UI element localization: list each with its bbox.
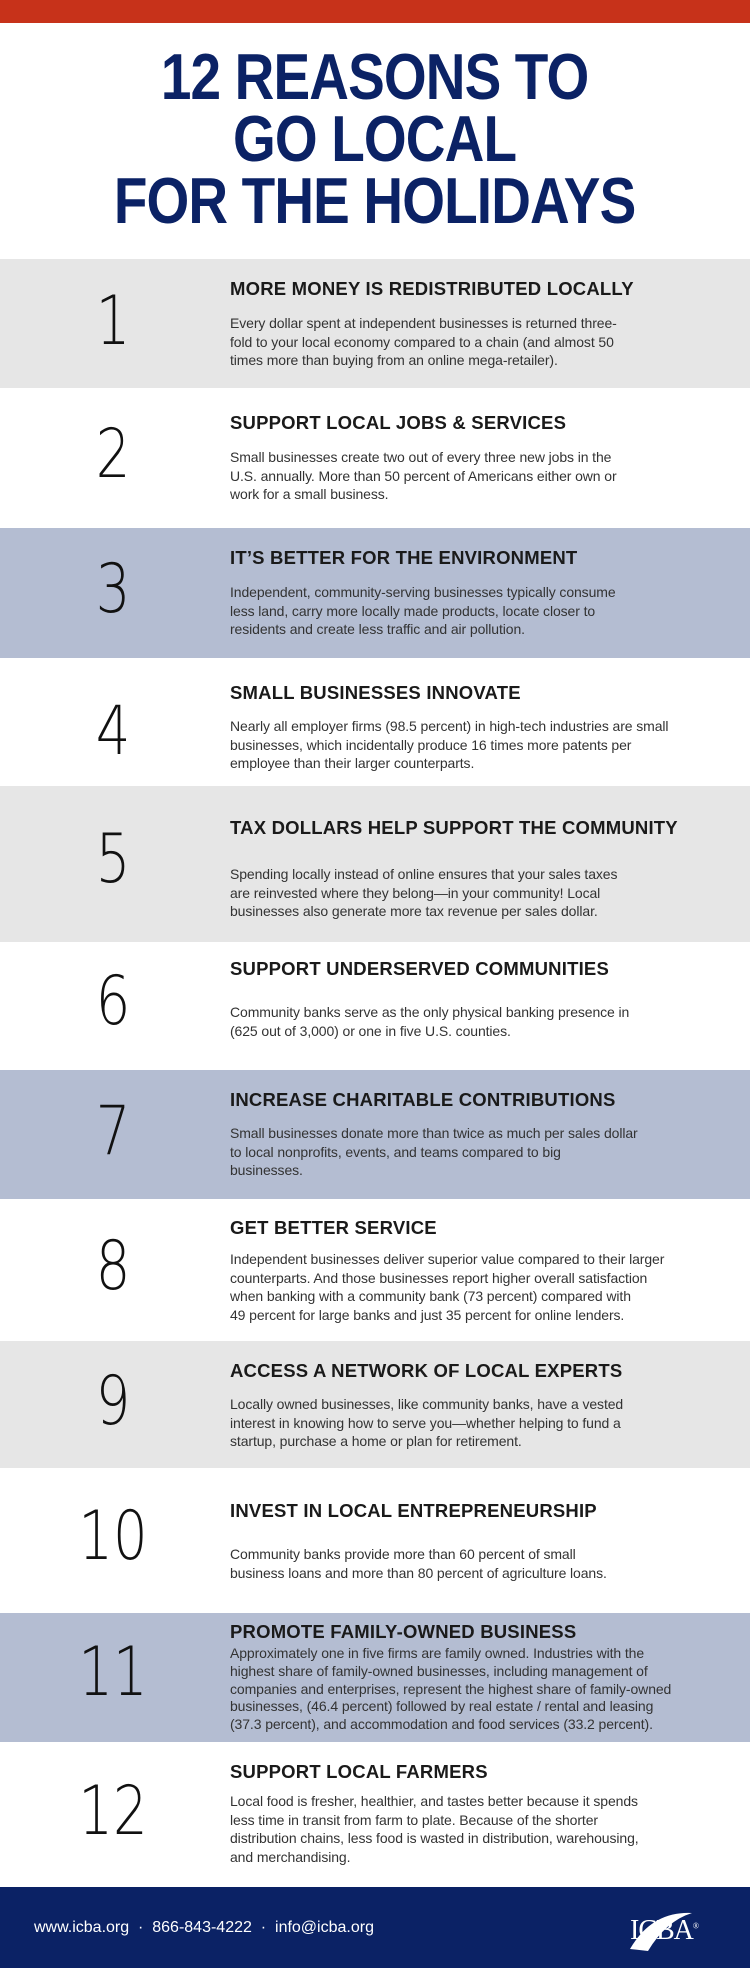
text 11: Approximately one in five firms are family owned. Industries with the bbox=[230, 1645, 644, 1661]
text 6 bbox=[230, 1004, 629, 1039]
title: FOR THE HOLIDAYS bbox=[114, 164, 636, 237]
text 5: Spending locally instead of online ensures that your sales taxes bbox=[230, 866, 617, 882]
text 12 bbox=[230, 1793, 639, 1865]
text 5: are reinvested where they belong—in your community! Local bbox=[230, 885, 600, 901]
text 11 bbox=[230, 1645, 671, 1732]
heading 9: ACCESS A NETWORK OF LOCAL EXPERTS bbox=[230, 1360, 622, 1381]
panel: reason 9 bbox=[0, 1341, 750, 1468]
heading 2: SUPPORT LOCAL JOBS & SERVICES bbox=[230, 412, 566, 433]
text 4: businesses, which incidentally produce 16 times more patents per bbox=[230, 737, 631, 753]
number 2: 2 bbox=[96, 415, 130, 494]
text 3 bbox=[230, 584, 616, 637]
text 1: fold to your local economy compared to a chain (and almost 50 bbox=[230, 334, 614, 350]
text 9: startup, purchase a home or plan for retirement. bbox=[230, 1433, 522, 1449]
heading 7: INCREASE CHARITABLE CONTRIBUTIONS bbox=[230, 1089, 616, 1110]
text 4: Nearly all employer firms (98.5 percent) in high-tech industries are small bbox=[230, 718, 668, 734]
logo: ICBA: ICBA® bbox=[630, 1915, 698, 1946]
text 6: (625 out of 3,000) or one in five U.S. counties. bbox=[230, 1023, 511, 1039]
text 4: employee than their larger counterparts. bbox=[230, 755, 474, 771]
text 7: to local nonprofits, events, and teams compared to big bbox=[230, 1144, 561, 1160]
number 9: 9 bbox=[96, 1362, 130, 1441]
number 10: 10 bbox=[78, 1497, 148, 1576]
text 10: business loans and more than 80 percent of agriculture loans. bbox=[230, 1565, 607, 1581]
text 5 bbox=[230, 866, 617, 919]
text 1: times more than buying from an online mega-retailer). bbox=[230, 352, 558, 368]
text 11: highest share of family-owned businesses, including management of bbox=[230, 1663, 648, 1679]
text 3: Independent, community-serving businesses typically consume bbox=[230, 584, 616, 600]
text 12: and merchandising. bbox=[230, 1849, 350, 1865]
text 2: Small businesses create two out of every three new jobs in the bbox=[230, 449, 611, 465]
text 7 bbox=[230, 1125, 638, 1178]
text 1: Every dollar spent at independent businesses is returned three- bbox=[230, 315, 617, 331]
panel: reason 7 bbox=[0, 1070, 750, 1199]
panel: reason 5 bbox=[0, 786, 750, 942]
panel: reason 11 bbox=[0, 1613, 750, 1742]
text 8: when banking with a community bank (73 percent) compared with bbox=[230, 1288, 631, 1304]
text 8: counterparts. And those businesses report higher overall satisfaction bbox=[230, 1270, 647, 1286]
text 10 bbox=[230, 1546, 607, 1581]
footer bbox=[0, 1887, 750, 1968]
text 12: Local food is fresher, healthier, and tastes better because it spends bbox=[230, 1793, 638, 1809]
heading 11: PROMOTE FAMILY-OWNED BUSINESS bbox=[230, 1621, 576, 1642]
text 8 bbox=[230, 1251, 664, 1323]
text 2: U.S. annually. More than 50 percent of Americans either own or bbox=[230, 468, 617, 484]
text 12: distribution chains, less food is wasted in distribution, warehousing, bbox=[230, 1830, 639, 1846]
number 3: 3 bbox=[96, 550, 130, 629]
text 9: Locally owned businesses, like community banks, have a vested bbox=[230, 1396, 623, 1412]
text 8: Independent businesses deliver superior value compared to their larger bbox=[230, 1251, 664, 1267]
heading 8: GET BETTER SERVICE bbox=[230, 1217, 437, 1238]
heading 10: INVEST IN LOCAL ENTREPRENEURSHIP bbox=[230, 1500, 597, 1521]
number 4: 4 bbox=[96, 692, 130, 771]
number 12: 12 bbox=[78, 1772, 148, 1851]
text 2: work for a small business. bbox=[230, 486, 388, 502]
text 10: Community banks provide more than 60 percent of small bbox=[230, 1546, 576, 1562]
top red bar bbox=[0, 0, 750, 23]
text 6: Community banks serve as the only physical banking presence in bbox=[230, 1004, 629, 1020]
text 9: interest in knowing how to serve you—whether helping to fund a bbox=[230, 1415, 621, 1431]
number 1: 1 bbox=[96, 282, 130, 361]
number 8: 8 bbox=[96, 1227, 130, 1306]
text 7: Small businesses donate more than twice as much per sales dollar bbox=[230, 1125, 638, 1141]
number 6: 6 bbox=[96, 962, 130, 1041]
text 3: residents and create less traffic and air pollution. bbox=[230, 621, 525, 637]
text 1 bbox=[230, 315, 617, 368]
title bbox=[114, 40, 636, 237]
number 5: 5 bbox=[96, 820, 130, 899]
panel: reason 2 bbox=[0, 388, 750, 528]
heading 12: SUPPORT LOCAL FARMERS bbox=[230, 1761, 488, 1782]
heading 5: TAX DOLLARS HELP SUPPORT THE COMMUNITY bbox=[230, 817, 678, 838]
title: GO LOCAL bbox=[233, 102, 517, 175]
text 3: less land, carry more locally made products, locate closer to bbox=[230, 603, 595, 619]
text 9 bbox=[230, 1396, 623, 1449]
heading 6: SUPPORT UNDERSERVED COMMUNITIES bbox=[230, 958, 609, 979]
number 7: 7 bbox=[96, 1092, 130, 1171]
text 5: businesses also generate more tax revenue per sales dollar. bbox=[230, 903, 598, 919]
text 2 bbox=[230, 449, 617, 502]
text 11: businesses, (46.4 percent) followed by real estate / rental and leasing bbox=[230, 1698, 653, 1714]
heading 1: MORE MONEY IS REDISTRIBUTED LOCALLY bbox=[230, 278, 634, 299]
text 12: less time in transit from farm to plate. Because of the shorter bbox=[230, 1812, 598, 1828]
heading 3: IT’S BETTER FOR THE ENVIRONMENT bbox=[230, 547, 577, 568]
text 8: 49 percent for large banks and just 35 percent for online lenders. bbox=[230, 1307, 624, 1323]
panel: reason 3 bbox=[0, 528, 750, 658]
number 11: 11 bbox=[78, 1633, 148, 1712]
text 7: businesses. bbox=[230, 1162, 303, 1178]
footer contact text: www.icba.org · 866-843-4222 · info@icba.org bbox=[34, 1919, 374, 1936]
text 4 bbox=[230, 718, 668, 771]
heading 4: SMALL BUSINESSES INNOVATE bbox=[230, 682, 521, 703]
title: 12 REASONS TO bbox=[161, 40, 589, 113]
text 11: (37.3 percent), and accommodation and food services (33.2 percent). bbox=[230, 1716, 653, 1732]
text 11: companies and enterprises, represent the highest share of family-owned bbox=[230, 1681, 671, 1697]
panel: reason 1 bbox=[0, 259, 750, 388]
